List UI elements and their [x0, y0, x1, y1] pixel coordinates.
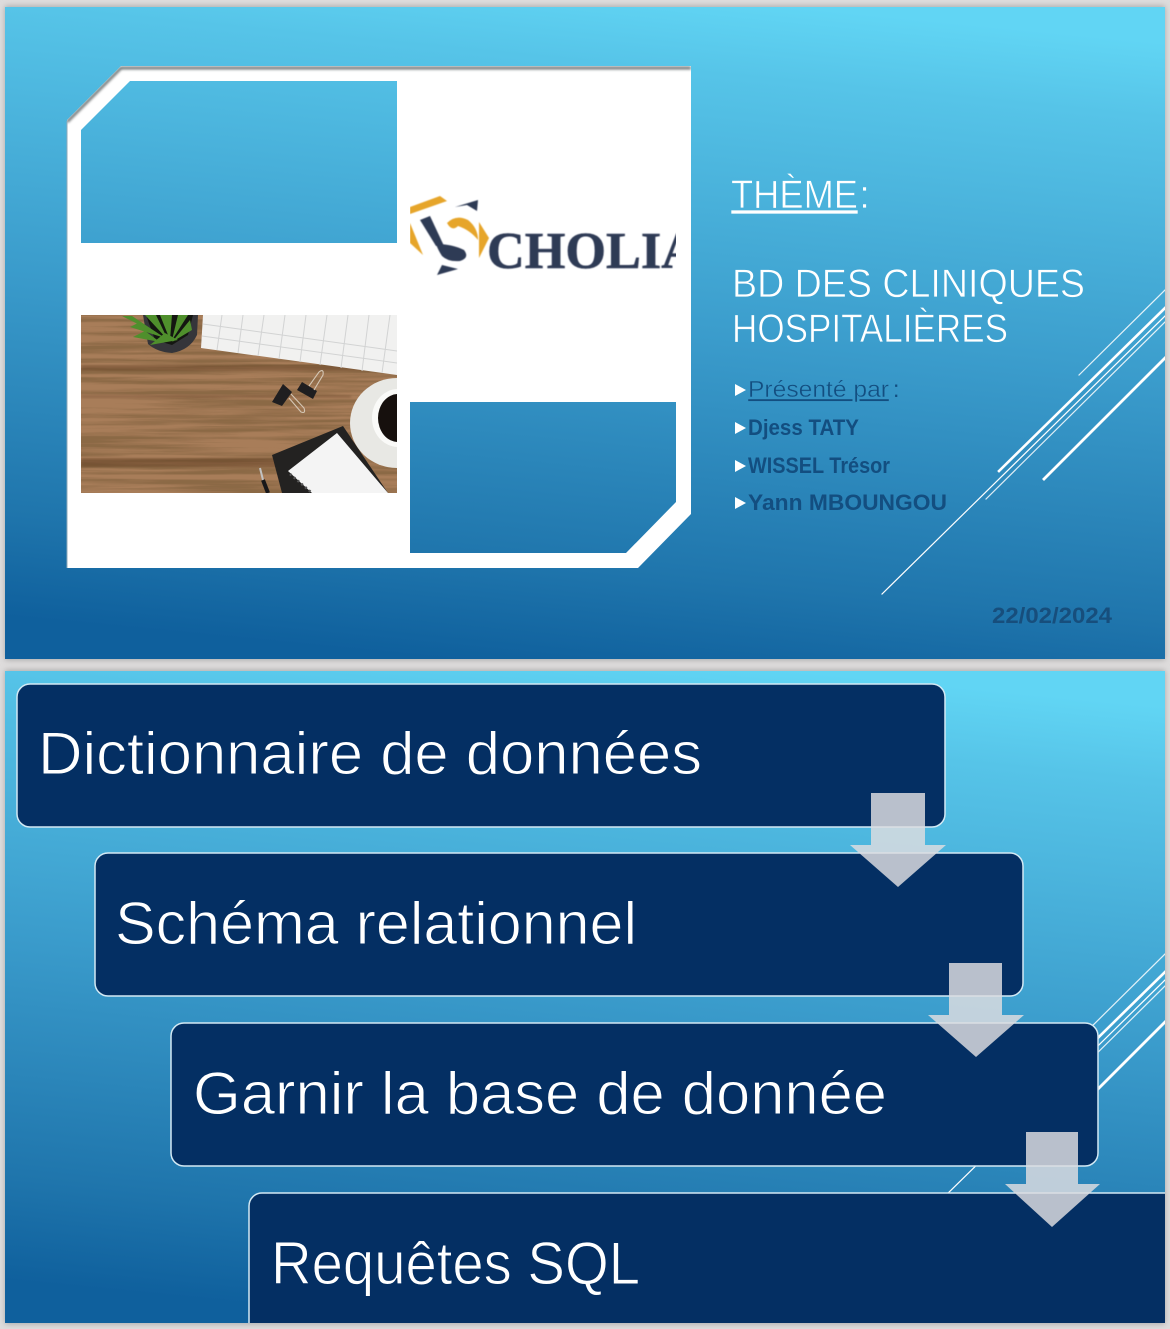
Scholia logo	[410, 195, 676, 276]
step 4: Requêtes SQL	[249, 1193, 1170, 1329]
slide 1: title slide	[5, 7, 1165, 659]
slide 2 decorative diagonal lines	[948, 953, 1165, 1192]
presentation title: HOSPITALIÈRES	[732, 306, 1008, 351]
picture frame	[67, 66, 699, 568]
presentation title	[735, 269, 1083, 342]
top-left blue panel	[81, 81, 397, 243]
arrow: step 2 to 3	[928, 963, 1024, 1057]
step 2: Schéma relationnel: Schéma relationnel	[115, 890, 637, 957]
arrow: step 3 to 4	[1005, 1132, 1100, 1227]
pen	[260, 468, 268, 493]
theme heading: THÈME	[731, 172, 858, 217]
logo wordmark: CHOLIA	[487, 223, 699, 280]
slide 1 background	[5, 7, 1165, 659]
presenters list	[735, 376, 947, 515]
coffee cup	[350, 378, 397, 468]
date: 22/02/2024	[992, 603, 1113, 628]
plant	[122, 315, 198, 353]
notebook	[272, 426, 388, 493]
slide 1 decorative diagonal lines	[882, 290, 1165, 594]
presenters list: Djess TATY	[748, 415, 859, 440]
step 4: Requêtes SQL: Requêtes SQL	[271, 1230, 640, 1297]
step 2: Schéma relationnel	[95, 853, 1023, 996]
step 3: Garnir la base de donnée	[171, 1023, 1098, 1166]
presenters list: Présenté par	[748, 376, 889, 402]
step 1: Dictionnaire de données	[17, 684, 945, 827]
presenters list: Yann MBOUNGOU	[748, 490, 947, 515]
desk photo	[81, 315, 397, 493]
bullet arrows	[735, 384, 746, 509]
keyboard	[201, 315, 397, 375]
presenters list: WISSEL Trésor	[748, 453, 890, 478]
logo emblem	[410, 196, 489, 275]
bottom-right blue panel	[410, 402, 676, 553]
step 1: Dictionnaire de données: Dictionnaire de données	[38, 720, 702, 787]
binder clips	[272, 371, 323, 412]
step 3: Garnir la base de donnée: Garnir la base de donnée	[193, 1060, 887, 1127]
presentation title: BD DES CLINIQUES	[732, 262, 1085, 306]
theme heading: :	[859, 173, 870, 217]
slide 2: process steps	[5, 671, 1170, 1329]
presenters list: :	[893, 376, 899, 402]
slide 2 background	[5, 671, 1165, 1323]
arrow: step 1 to 2	[850, 793, 946, 887]
